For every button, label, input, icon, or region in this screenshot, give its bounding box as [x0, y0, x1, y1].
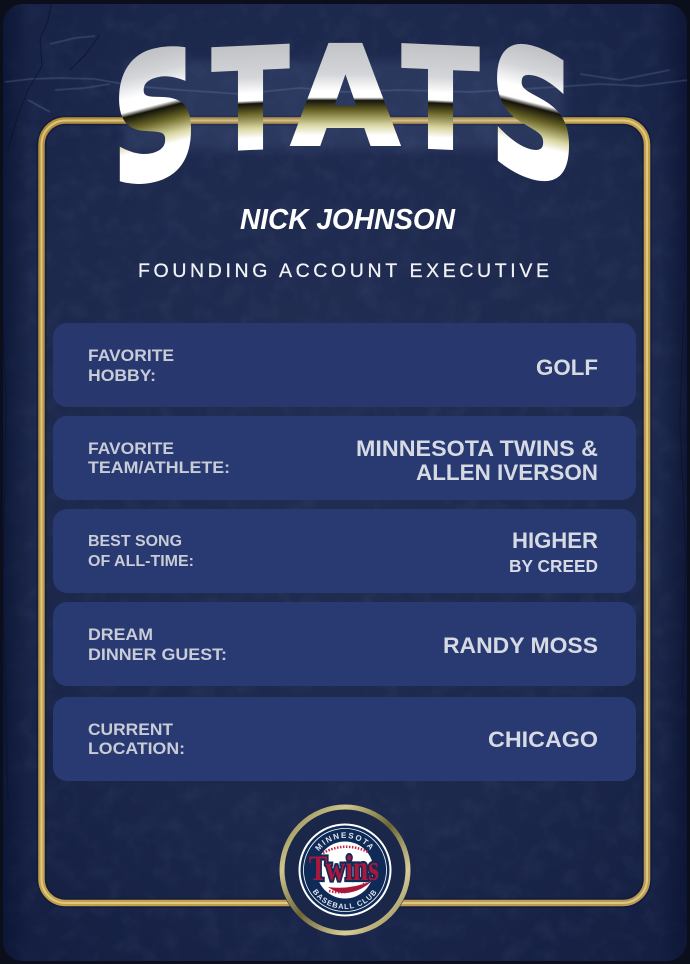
value: HIGHER — [512, 528, 598, 553]
job title: FOUNDING ACCOUNT EXECUTIVE — [138, 260, 549, 282]
Twins wordmark: Twins — [309, 847, 379, 888]
label: DREAM — [88, 625, 153, 644]
letter S left: S — [113, 9, 197, 227]
label — [88, 346, 174, 385]
label — [88, 720, 185, 758]
BASEBALL CLUB text: BASEBALL CLUB — [312, 888, 376, 910]
label: OF ALL-TIME: — [88, 553, 194, 570]
name: NICK JOHNSON — [240, 204, 456, 236]
letter S right: S — [491, 7, 575, 225]
label: DINNER GUEST: — [88, 645, 227, 664]
wordmark tail — [328, 881, 372, 893]
value — [509, 528, 598, 576]
label: FAVORITE — [88, 439, 174, 458]
logo disc — [298, 824, 392, 916]
badge: Minnesota Twins logo — [280, 804, 410, 936]
value: MINNESOTA TWINS & — [356, 436, 598, 461]
letter A: A — [292, 19, 399, 177]
row: dream dinner guest — [53, 602, 636, 686]
label: FAVORITE — [88, 346, 174, 365]
label — [88, 439, 230, 477]
letter T right: T — [403, 20, 478, 181]
label: TEAM/ATHLETE: — [88, 458, 230, 477]
value: RANDY MOSS — [443, 633, 598, 658]
label — [88, 533, 194, 570]
row: current location — [53, 697, 636, 781]
baseball — [316, 842, 374, 898]
value: ALLEN IVERSON — [416, 460, 598, 485]
gold ring — [279, 804, 411, 936]
title: STATS — [113, 7, 575, 227]
label: BEST SONG — [88, 533, 182, 550]
label — [88, 625, 227, 664]
row: favorite team/athlete — [53, 416, 636, 500]
label: LOCATION: — [88, 739, 185, 758]
stitches — [323, 847, 368, 892]
value — [356, 436, 598, 485]
row: favorite hobby — [53, 323, 636, 407]
gold frame — [42, 120, 647, 903]
label: HOBBY: — [88, 366, 156, 385]
value: BY CREED — [509, 556, 598, 576]
value: GOLF — [536, 355, 598, 380]
label: CURRENT — [88, 720, 174, 739]
title glow — [125, 60, 565, 150]
MINNESOTA text: MINNESOTA — [315, 832, 373, 851]
letter T left: T — [213, 20, 288, 182]
row: best song — [53, 509, 636, 593]
value: CHICAGO — [488, 727, 598, 752]
